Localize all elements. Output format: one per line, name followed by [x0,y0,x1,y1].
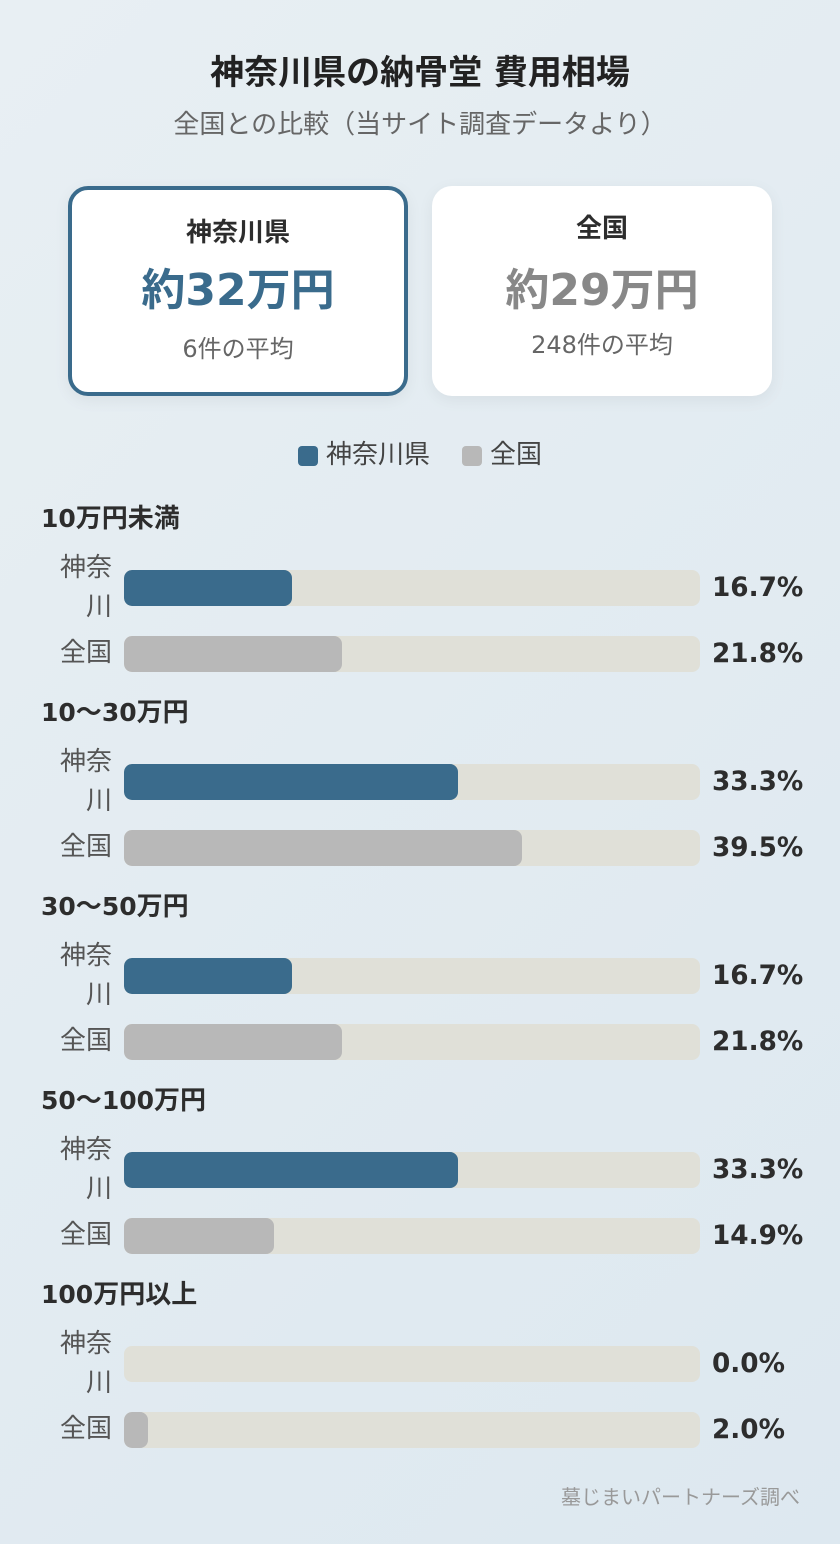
bar: national 2.0% [124,1412,700,1448]
subtitle: 全国との比較（当サイト調査データより） [173,110,667,140]
chart group: 500k to 1M yen [41,1086,803,1254]
chart group: 300k to 500k yen [41,892,803,1060]
card note: 248件の平均 [531,331,673,359]
chart group: over 1M yen [41,1280,785,1448]
value: 16.7% [712,961,803,991]
value: 33.3% [712,767,803,797]
group heading: 30～50万円 [41,892,189,922]
label: Kanagawa: 神奈川 [60,1135,112,1204]
label: Kanagawa: 神奈川 [60,747,112,816]
bar: national 21.8% [124,636,700,672]
legend [298,440,542,470]
group heading: 100万円以上 [41,1280,197,1310]
value: 33.3% [712,1155,803,1185]
panel: Kanagawa summary card [68,186,408,396]
bar: national 21.8% [124,1024,700,1060]
source note: 墓じまいパートナーズ調べ [561,1485,800,1509]
panel: national summary card [432,186,772,396]
legend swatch: national [462,446,482,466]
bar: national 14.9% [124,1218,700,1254]
label: Kanagawa: 神奈川 [60,941,112,1010]
value: 21.8% [712,639,803,669]
group heading: 50～100万円 [41,1086,206,1116]
value: 16.7% [712,573,803,603]
value: 39.5% [712,833,803,863]
value: 0.0% [712,1349,785,1379]
label: Kanagawa: 神奈川 [60,553,112,622]
value: 21.8% [712,1027,803,1057]
label: national: 全国 [60,638,112,668]
value: 14.9% [712,1221,803,1251]
chart group: 100k to 300k yen [41,698,803,866]
label: national: 全国 [60,832,112,862]
group heading: 10～30万円 [41,698,189,728]
bar: Kanagawa 33.3% [124,1152,700,1188]
legend label: Kanagawa: 神奈川県 [326,440,430,470]
label: Kanagawa: 神奈川 [60,1329,112,1398]
card label: 神奈川県 [186,218,290,248]
bar: Kanagawa 16.7% [124,570,700,606]
chart group: under 100k yen [41,504,803,672]
bar: Kanagawa 0.0% [124,1346,700,1382]
legend label: national: 全国 [490,440,542,470]
value: 2.0% [712,1415,785,1445]
card label: 全国 [576,214,628,244]
bar: Kanagawa 16.7% [124,958,700,994]
legend swatch: Kanagawa [298,446,318,466]
bar: Kanagawa 33.3% [124,764,700,800]
label: national: 全国 [60,1220,112,1250]
card value: 約32万円 [141,265,335,316]
group heading: 10万円未満 [41,504,180,534]
title: 神奈川県の納骨堂 費用相場 [210,53,630,93]
label: national: 全国 [60,1026,112,1056]
label: national: 全国 [60,1414,112,1444]
bar: national 39.5% [124,830,700,866]
card note: 6件の平均 [182,335,294,363]
card value: 約29万円 [505,265,699,316]
